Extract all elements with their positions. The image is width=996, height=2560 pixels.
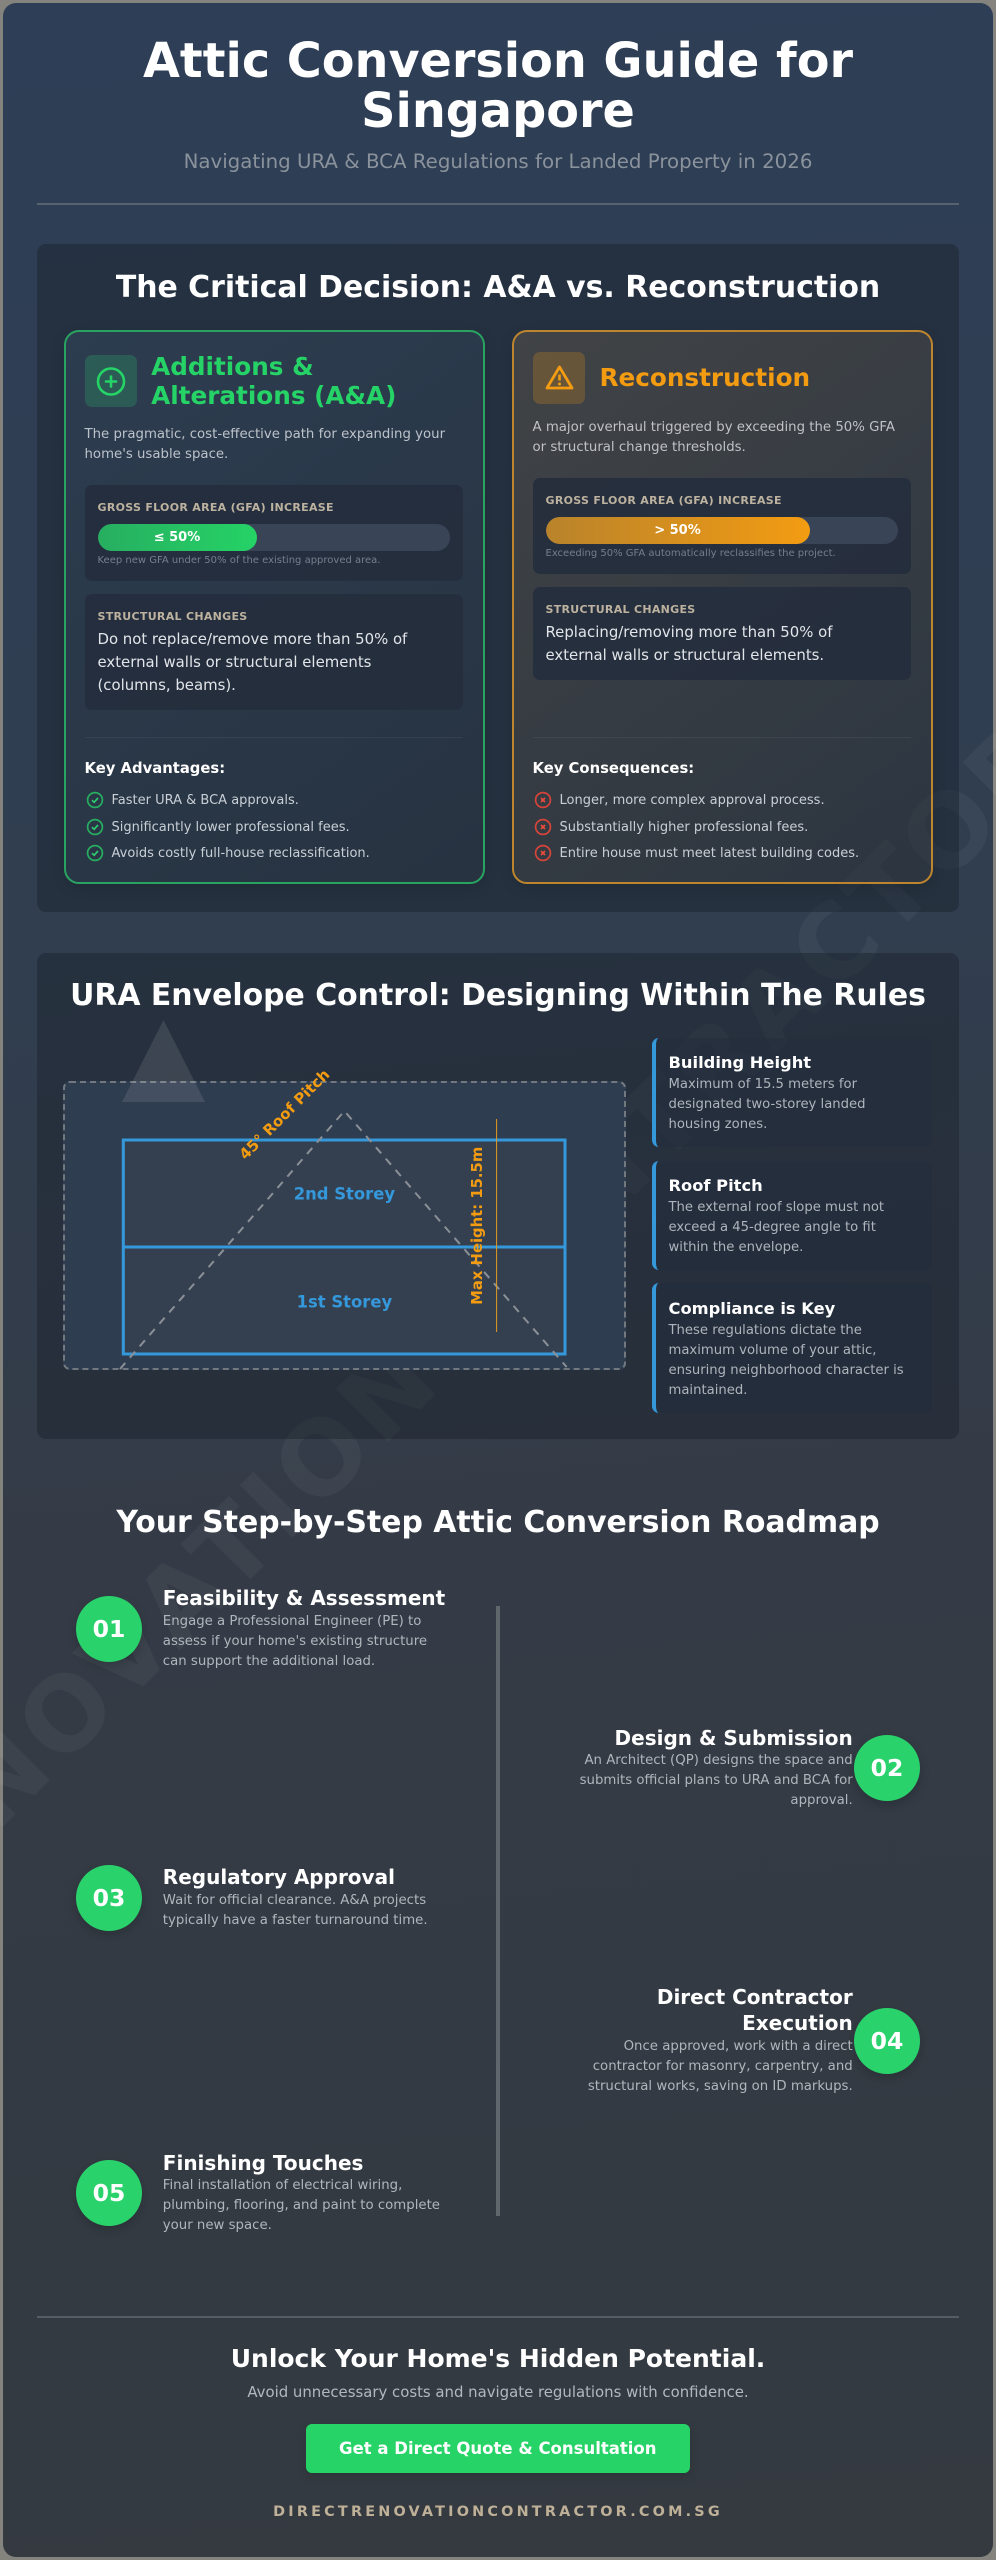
- header divider: [37, 203, 959, 205]
- step 1: [76, 1586, 445, 1669]
- step number: 04: [871, 2027, 903, 2055]
- GFA label: GROSS FLOOR AREA (GFA) INCREASE: [546, 494, 782, 507]
- panel: critical decision: [37, 244, 959, 912]
- info text: [668, 1077, 866, 1132]
- heading: roadmap: Your Step-by-Step Attic Conversion Roadmap: [116, 1505, 880, 1540]
- info title: Compliance is Key: [668, 1299, 835, 1318]
- section: roadmap: [76, 1505, 920, 2233]
- step number: 01: [93, 1615, 125, 1643]
- advantage 2: Significantly lower professional fees.: [112, 820, 350, 835]
- bar: GFA over 50%: > 50%: [654, 523, 701, 538]
- structural text: [98, 630, 408, 694]
- card description: or structural change thresholds.: [532, 440, 746, 455]
- header: [37, 34, 959, 205]
- structural text: (columns, beams).: [98, 676, 236, 694]
- info card: building height: [652, 1038, 932, 1147]
- GFA label: GROSS FLOOR AREA (GFA) INCREASE: [98, 501, 334, 514]
- title: Attic Conversion Guide for: [143, 34, 853, 89]
- structural text: external walls or structural elements.: [546, 646, 824, 664]
- step text: can support the additional load.: [163, 1654, 375, 1669]
- step text: [163, 1893, 428, 1928]
- bar: GFA under 50%: ≤ 50%: [154, 530, 200, 545]
- diagram: building envelope: [63, 1081, 626, 1370]
- heading: envelope control: URA Envelope Control: Designing Within The Rules: [70, 978, 926, 1012]
- info text: within the envelope.: [668, 1240, 803, 1255]
- card description: The pragmatic, cost-effective path for expanding your: [84, 427, 445, 442]
- step text: Wait for official clearance. A&A projects: [163, 1893, 426, 1908]
- structural text: external walls or structural elements: [98, 652, 371, 670]
- icon: warning triangle: [532, 352, 584, 404]
- info text: Maximum of 15.5 meters for: [668, 1077, 857, 1092]
- footer heading: Unlock Your Home's Hidden Potential.: [231, 2344, 765, 2373]
- roof pitch dashed line: [120, 1111, 567, 1369]
- step 5: [76, 2151, 440, 2233]
- step title: Execution: [742, 2011, 853, 2035]
- step text: Engage a Professional Engineer (PE) to: [163, 1614, 421, 1629]
- card description: A major overhaul triggered by exceeding the 50% GFA: [532, 420, 895, 435]
- step text: [588, 2039, 853, 2094]
- CTA button: [306, 2424, 690, 2473]
- card: reconstruction: [512, 330, 932, 884]
- step title: Design & Submission: [615, 1726, 853, 1750]
- heading: critical decision: The Critical Decision: A&A vs. Reconstruction: [116, 270, 880, 305]
- step text: assess if your home's existing structure: [163, 1634, 427, 1649]
- info card: roof pitch: [652, 1161, 932, 1270]
- card title: Additions &: [151, 352, 314, 381]
- step text: [163, 2178, 440, 2233]
- box: GFA increase: [532, 478, 910, 574]
- card description: home's usable space.: [84, 447, 228, 462]
- step text: [580, 1753, 853, 1808]
- card: additions and alterations: [64, 330, 484, 884]
- info text: maintained.: [668, 1383, 747, 1398]
- step number: [76, 2160, 142, 2226]
- card title: [151, 352, 396, 410]
- step title: Regulatory Approval: [163, 1865, 395, 1889]
- timeline line: [496, 1606, 500, 2216]
- advantage 1: Faster URA & BCA approvals.: [112, 793, 299, 808]
- advantage 3: Avoids costly full-house reclassification.: [112, 846, 370, 861]
- step text: structural works, saving on ID markups.: [588, 2079, 853, 2094]
- info text: These regulations dictate the: [668, 1323, 862, 1338]
- step number: [76, 1596, 142, 1662]
- info title: Roof Pitch: [668, 1176, 763, 1195]
- info text: [668, 1323, 904, 1398]
- structural text: Replacing/removing more than 50% of: [546, 622, 832, 640]
- bar: GFA under 50%: [98, 524, 450, 551]
- footer: [37, 2316, 959, 2520]
- step number: [854, 1735, 920, 1801]
- card title: Alterations (A&A): [151, 381, 396, 410]
- footer divider: [37, 2316, 959, 2318]
- info text: housing zones.: [668, 1117, 767, 1132]
- box: GFA increase: [84, 485, 462, 581]
- step 3: [76, 1865, 428, 1932]
- CTA button: Get a Direct Quote & Consultation: [339, 2439, 657, 2458]
- label: roof pitch: 45° Roof Pitch: [236, 1066, 333, 1163]
- key consequences heading: Key Consequences:: [532, 760, 694, 777]
- step number: [854, 2008, 920, 2074]
- website URL: DIRECTRENOVATIONCONTRACTOR.COM.SG: [273, 2504, 723, 2520]
- step text: typically have a faster turnaround time.: [163, 1913, 428, 1928]
- info text: designated two-storey landed: [668, 1097, 866, 1112]
- structural text: Do not replace/remove more than 50% of: [98, 630, 407, 648]
- info title: Building Height: [668, 1053, 811, 1072]
- step title: Finishing Touches: [163, 2151, 363, 2175]
- label: max height: Max Height: 15.5m: [469, 1147, 486, 1305]
- info text: ensuring neighborhood character is: [668, 1363, 904, 1378]
- subtitle: Navigating URA & BCA Regulations for Landed Property in 2026: [184, 150, 812, 173]
- info text: exceed a 45-degree angle to fit: [668, 1220, 876, 1235]
- list: consequences: [534, 792, 859, 862]
- storey outline: [123, 1140, 565, 1354]
- step text: Final installation of electrical wiring,: [163, 2178, 402, 2193]
- step text: approval.: [790, 1793, 853, 1808]
- consequence 3: Entire house must meet latest building codes.: [560, 846, 859, 861]
- footer text: Avoid unnecessary costs and navigate regulations with confidence.: [247, 2383, 749, 2401]
- list: advantages: [86, 792, 370, 862]
- step number: [76, 1865, 142, 1931]
- step text: Once approved, work with a direct: [624, 2039, 853, 2054]
- icon: faded triangle: [122, 1020, 205, 1102]
- step number: 03: [93, 1884, 125, 1912]
- title: [143, 34, 853, 139]
- step text: plumbing, flooring, and paint to complete: [163, 2198, 440, 2213]
- structural text: [546, 622, 833, 664]
- structural label: STRUCTURAL CHANGES: [98, 610, 248, 623]
- floor divider: [123, 1246, 565, 1248]
- consequence 2: Substantially higher professional fees.: [560, 820, 808, 835]
- step text: contractor for masonry, carpentry, and: [593, 2059, 853, 2074]
- step title: Feasibility & Assessment: [163, 1586, 445, 1610]
- max height line: [496, 1119, 498, 1332]
- label: 2nd storey: 2nd Storey: [294, 1184, 395, 1204]
- GFA note: Keep new GFA under 50% of the existing approved area.: [98, 555, 380, 566]
- card description: [84, 427, 446, 462]
- info text: maximum volume of your attic,: [668, 1343, 876, 1358]
- step 2: [580, 1726, 920, 1808]
- consequence 1: Longer, more complex approval process.: [560, 793, 825, 808]
- step text: your new space.: [163, 2218, 272, 2233]
- bar: GFA over 50%: [546, 517, 898, 544]
- step number: 02: [871, 1754, 903, 1782]
- key advantages heading: Key Advantages:: [84, 760, 225, 777]
- step text: [163, 1614, 427, 1669]
- step text: submits official plans to URA and BCA for: [580, 1773, 853, 1788]
- info text: [668, 1200, 884, 1255]
- info text: The external roof slope must not: [668, 1200, 884, 1215]
- card title: Reconstruction: [600, 363, 810, 392]
- panel: URA envelope control: [37, 953, 959, 1439]
- box: structural changes: [532, 587, 910, 680]
- step text: An Architect (QP) designs the space and: [584, 1753, 853, 1768]
- title: Singapore: [361, 84, 635, 139]
- step number: 05: [93, 2179, 125, 2207]
- GFA note: Exceeding 50% GFA automatically reclassifies the project.: [546, 548, 836, 559]
- structural label: STRUCTURAL CHANGES: [546, 603, 696, 616]
- step title: [657, 1985, 853, 2035]
- card description: [532, 420, 895, 455]
- icon: plus circle: [84, 355, 136, 407]
- label: 1st storey: 1st Storey: [297, 1292, 392, 1312]
- step 4: [588, 1985, 920, 2094]
- info card: compliance: [652, 1283, 932, 1413]
- step title: Direct Contractor: [657, 1985, 853, 2009]
- box: structural changes: [84, 594, 462, 710]
